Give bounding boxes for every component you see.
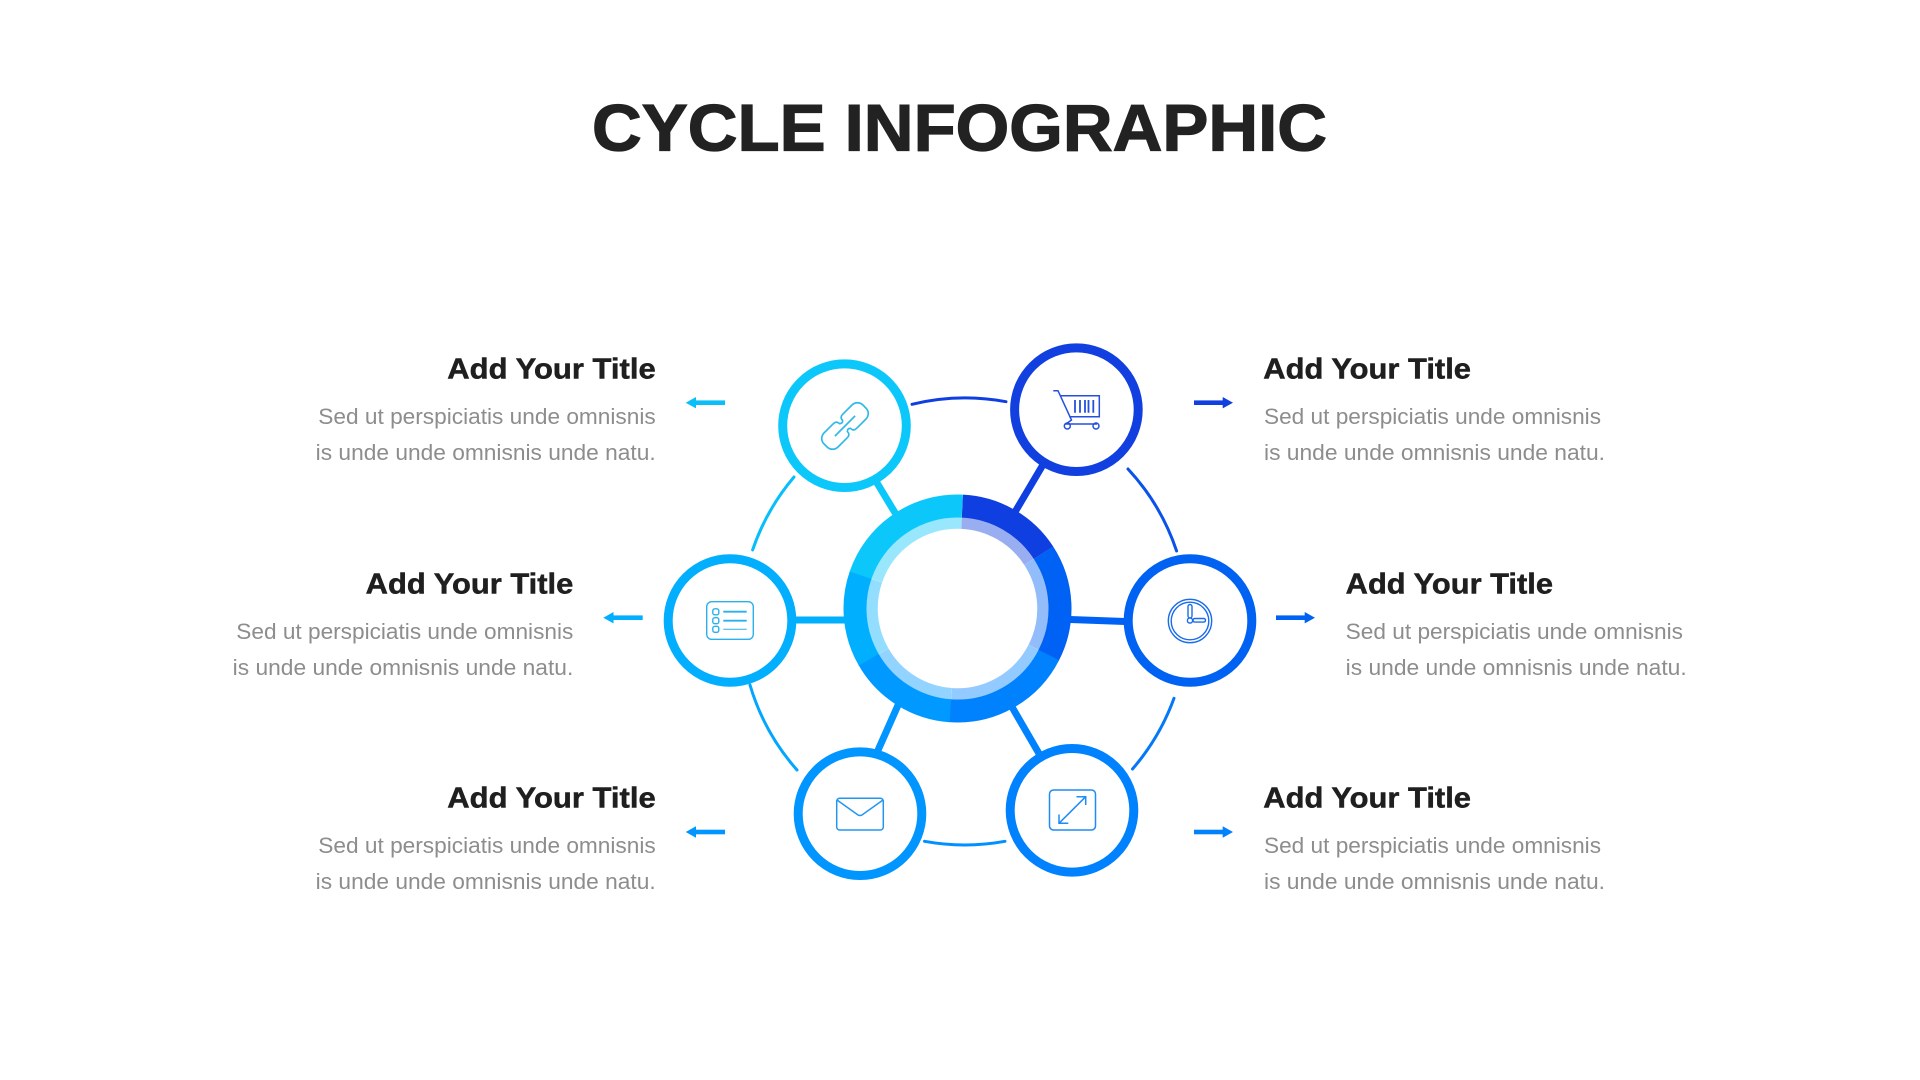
callout: top left: Sed ut perspiciatis unde omnisnis: [318, 404, 656, 429]
callout: top left: Add Your Title: [447, 354, 656, 386]
callout: bottom right: [1263, 782, 1605, 894]
icon: clock: [1168, 599, 1212, 643]
callout: middle left: Add Your Title: [366, 568, 573, 600]
icon: shopping cart: [1053, 391, 1099, 429]
callout: top right: [1263, 354, 1605, 465]
node: cart: [1015, 348, 1138, 512]
arrow: middle left: [603, 612, 643, 623]
arrow: bottom right: [1194, 826, 1233, 838]
callout: middle left: [233, 568, 573, 680]
icon: expand arrows: [1050, 790, 1096, 830]
callout: bottom left: Sed ut perspiciatis unde omnisnis: [318, 833, 656, 858]
callout: bottom left: is unde unde omnisnis unde natu.: [316, 869, 656, 894]
arc: list to link: [753, 477, 794, 550]
node: link: [783, 364, 906, 516]
callout: middle right: Sed ut perspiciatis unde omnisnis: [1346, 619, 1683, 644]
callout: top right: Sed ut perspiciatis unde omnisnis: [1264, 404, 1601, 429]
inner light ring segments: [839, 490, 1076, 727]
node: list: [668, 559, 846, 682]
callout: top right: Add Your Title: [1263, 354, 1471, 386]
icon: checklist: [707, 602, 753, 639]
arrow: bottom left: [686, 826, 725, 838]
callout: top right: is unde unde omnisnis unde natu.: [1264, 440, 1605, 465]
arc: clock to expand: [1132, 698, 1174, 769]
arc: mail to list: [750, 685, 797, 770]
callout: middle right: [1346, 568, 1687, 680]
arc: link to cart: [912, 398, 1006, 404]
callout: middle left: Sed ut perspiciatis unde omnisnis: [236, 619, 573, 644]
title: CYCLE INFOGRAPHIC: [592, 91, 1327, 165]
arrow: top right: [1194, 397, 1233, 408]
arrow: top left: [686, 397, 725, 408]
node: expand: [1010, 707, 1134, 872]
node: mail: [798, 703, 922, 876]
icon: envelope: [837, 798, 883, 830]
callout: bottom left: Add Your Title: [447, 782, 656, 814]
callout: bottom right: Sed ut perspiciatis unde omnisnis: [1264, 833, 1601, 858]
node: clock: [1070, 559, 1252, 682]
central hub ring: [816, 467, 1099, 750]
callout: top left: is unde unde omnisnis unde natu.: [316, 440, 656, 465]
arc: cart to clock: [1128, 469, 1177, 551]
arrow: middle right: [1276, 612, 1315, 623]
callout: bottom right: is unde unde omnisnis unde natu.: [1264, 869, 1605, 894]
callout: middle left: is unde unde omnisnis unde natu.: [233, 655, 573, 680]
callout: top left: [316, 354, 656, 465]
callout: middle right: Add Your Title: [1346, 568, 1553, 600]
outer cycle arcs: [750, 398, 1177, 845]
callout: bottom left: [316, 782, 656, 894]
arc: expand to mail: [924, 841, 1005, 845]
callout: middle right: is unde unde omnisnis unde natu.: [1346, 655, 1687, 680]
outer ring segments: [816, 467, 1099, 750]
icon: chain link: [819, 400, 871, 452]
callout: bottom right: Add Your Title: [1263, 782, 1471, 814]
